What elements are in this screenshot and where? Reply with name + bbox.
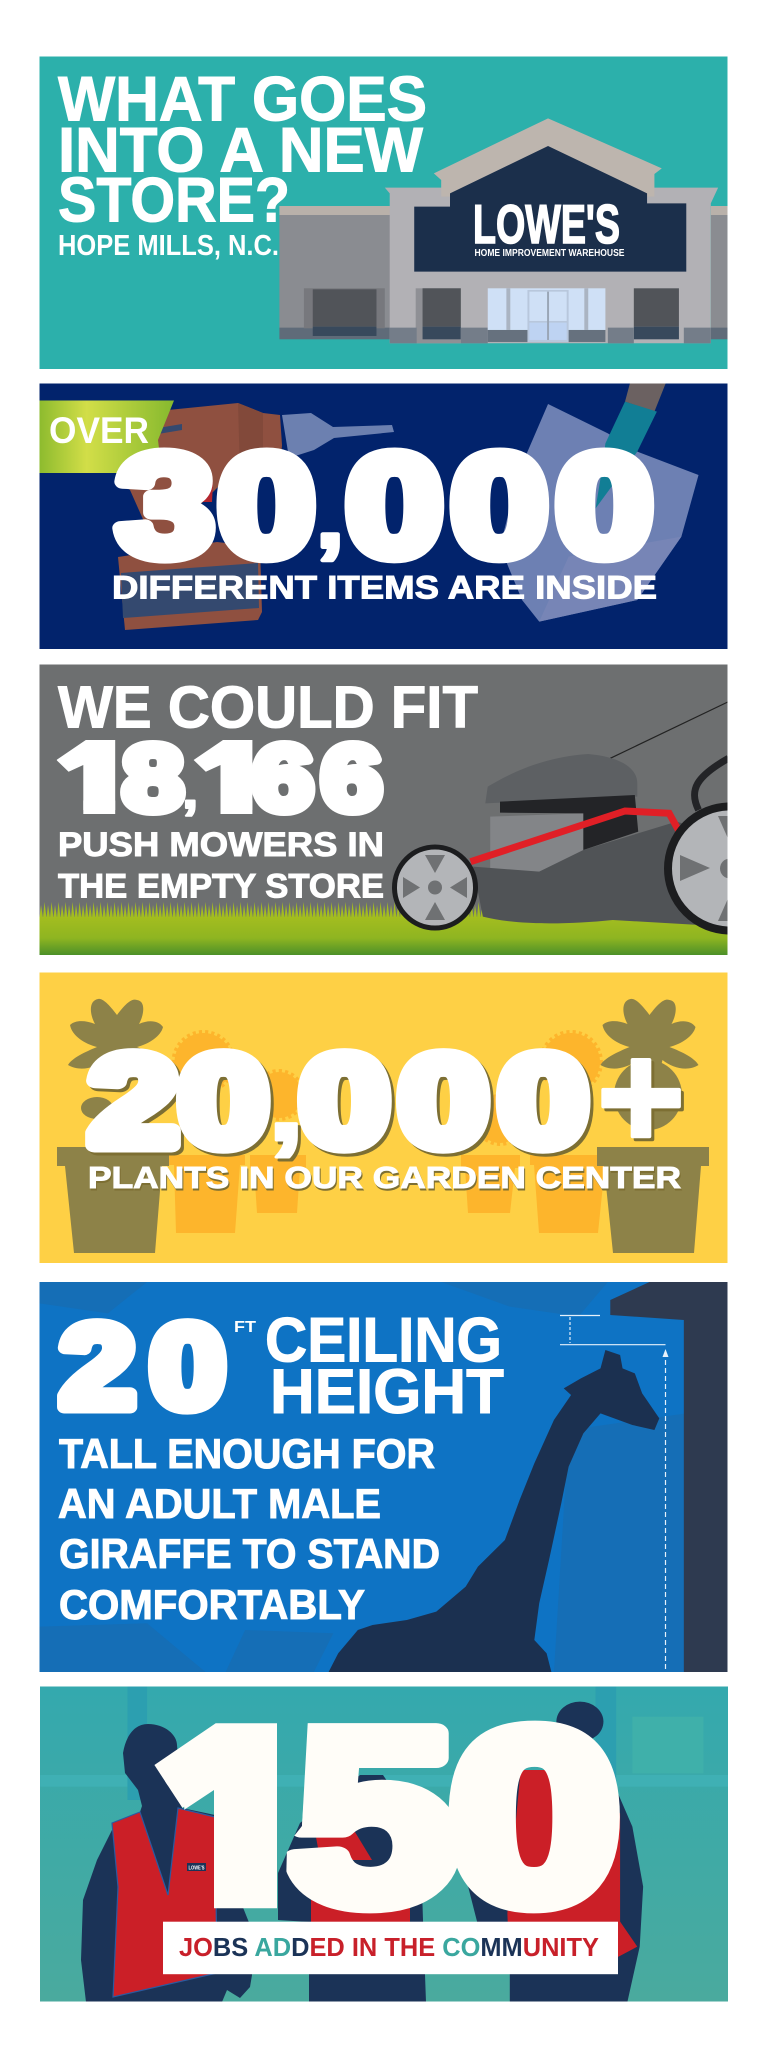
background warehouse structure [40, 1687, 728, 1800]
logo text: LOWE'S [473, 193, 620, 255]
figure: middle employee [278, 1775, 426, 2002]
subtitle: location: HOPE MILLS, N.C. [58, 230, 279, 262]
caption: plants in our garden center: PLANTS IN OUR GARDEN CENTER [88, 1160, 681, 1195]
figures: three employees [81, 1702, 643, 2002]
big number: 150: 50 [286, 1680, 620, 1953]
big number: 18,166 [56, 740, 384, 817]
illustration: orange background plants [169, 1033, 610, 1233]
caption box: jobs added [163, 1922, 618, 1974]
panel: garden center [40, 972, 728, 1263]
logo text [474, 204, 624, 256]
figure: right employee [468, 1702, 643, 2002]
badge: name tag: LOWE'S [188, 1866, 205, 1872]
big number: 30,000: , [316, 470, 344, 565]
wall and ceiling beam [610, 1282, 728, 1672]
logo text: HOME IMPROVEMENT WAREHOUSE [474, 248, 625, 259]
panel: jobs [40, 1680, 728, 2002]
big number: 18,166: 66 [253, 726, 382, 830]
big number: 20,000+: + [597, 1012, 685, 1180]
icon: rear wheel [664, 802, 728, 934]
big number: 18,166: 1 [67, 726, 128, 830]
illustration: giraffe silhouette [328, 1350, 659, 1672]
big number: 18,166: , [182, 762, 198, 819]
grass [40, 902, 728, 955]
big number: 20,000+: 000 [300, 1029, 588, 1172]
text: giraffe comparison: COMFORTABLY [59, 1581, 365, 1628]
title: STORE? [58, 166, 290, 236]
panel: 30,000 items [40, 383, 728, 649]
figure: left employee [81, 1724, 252, 2002]
big number: 30,000: 30 [117, 424, 315, 586]
ribbon: OVER: OVER [49, 410, 149, 451]
title: INTO A NEW [58, 116, 424, 186]
text: giraffe comparison [58, 1430, 440, 1628]
heading: ceiling height: HEIGHT [270, 1357, 504, 1427]
panel: ceiling height [39, 1282, 728, 1672]
big number: 20 ft [57, 1318, 256, 1415]
heading: we could fit: WE COULD FIT [58, 674, 478, 740]
title: WHAT GOES [58, 65, 427, 135]
illustration: lawn mower [471, 702, 728, 927]
panel: title and store [40, 56, 728, 369]
text: giraffe comparison: GIRAFFE TO STAND [59, 1530, 440, 1577]
big number: 18,166: 1 [201, 726, 262, 830]
heading: ceiling height [266, 1316, 504, 1414]
big number: 18,166: 8 [122, 726, 184, 830]
icon: shovel [500, 383, 699, 622]
text: giraffe comparison: AN ADULT MALE [58, 1480, 381, 1527]
big number: 20,000+ [85, 1048, 684, 1162]
caption box: jobs added: JOBS ADDED IN THE COMMUNITY [179, 1932, 599, 1962]
caption: push mowers: THE EMPTY STORE [58, 867, 384, 905]
illustration: Lowe's store front [279, 118, 728, 343]
caption: push mowers: PUSH MOWERS IN [58, 826, 384, 864]
illustration: right potted plant [597, 999, 709, 1253]
background camouflage pattern [39, 1282, 686, 1672]
heading: ceiling height: CEILING [265, 1306, 502, 1376]
ribbon: OVER [40, 400, 174, 473]
big number: 150: 1 [144, 1680, 315, 1953]
illustration: left potted plant [57, 999, 169, 1253]
icon: front wheel [394, 847, 476, 928]
big number: 20 ft: 20 [60, 1300, 225, 1432]
big number: 20,000+: , [267, 1041, 305, 1164]
text: giraffe comparison: TALL ENOUGH FOR [59, 1430, 435, 1477]
icon: power drill [115, 403, 394, 630]
title [58, 76, 426, 222]
panel: push mowers [40, 664, 768, 955]
big number: 30,000: 000 [346, 424, 653, 586]
measurement lines and arrow [560, 1316, 668, 1672]
caption: different items: DIFFERENT ITEMS ARE INSIDE [112, 569, 657, 605]
caption: push mowers [58, 832, 384, 898]
big number: 20,000+: 20 [89, 1029, 268, 1172]
big number: 20 ft: FT [234, 1319, 256, 1336]
